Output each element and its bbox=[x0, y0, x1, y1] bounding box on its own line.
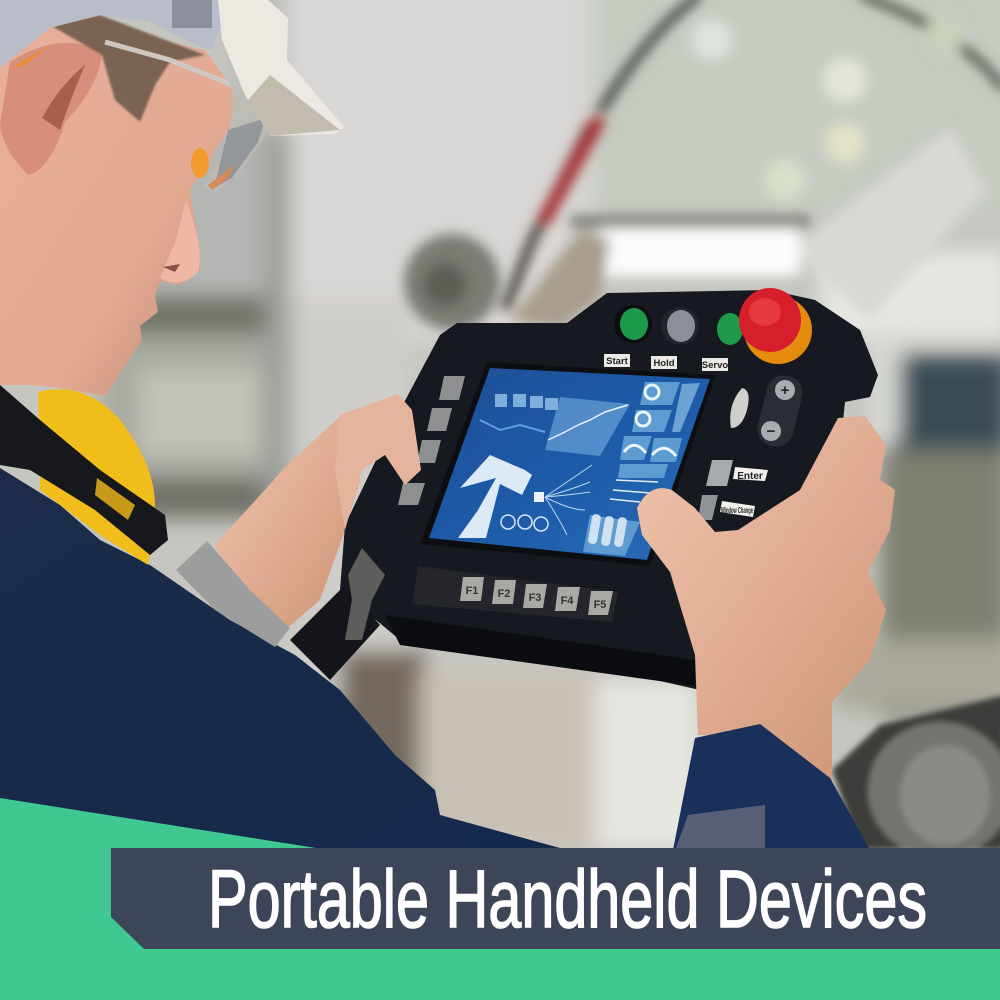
worker jacket bbox=[0, 468, 560, 848]
function keys bbox=[412, 566, 618, 622]
handheld control device bbox=[290, 288, 878, 690]
left side buttons bbox=[398, 376, 465, 505]
safety glasses bbox=[105, 42, 270, 192]
function keys: F4 bbox=[561, 595, 574, 607]
line trace bbox=[480, 420, 545, 432]
jog wheel bbox=[730, 388, 749, 428]
left hand fingers bbox=[335, 394, 421, 530]
sliders panel bbox=[587, 514, 628, 548]
enter and window change keys bbox=[698, 460, 768, 520]
yellow ear defender and headband bbox=[0, 385, 168, 565]
plus minus rocker: + bbox=[781, 382, 790, 399]
function keys: F1 bbox=[466, 585, 478, 597]
green corner shape bbox=[0, 798, 1000, 1000]
emergency stop button bbox=[739, 288, 812, 364]
hair bbox=[50, 15, 205, 122]
ear bbox=[0, 43, 102, 175]
robot arm silhouette bbox=[458, 455, 532, 538]
top buttons bbox=[614, 305, 743, 345]
function keys: F2 bbox=[498, 588, 510, 600]
right hand bbox=[637, 416, 895, 782]
nose bbox=[160, 200, 200, 283]
hard hat bbox=[0, 0, 344, 136]
dashboard tiles bbox=[495, 394, 558, 410]
plus minus rocker: − bbox=[767, 423, 776, 440]
enter and window change keys: Window Change bbox=[721, 506, 753, 515]
keys and lanyard bbox=[345, 548, 385, 640]
labels Start Hold Servo: Start bbox=[606, 356, 629, 367]
connector lines bbox=[534, 492, 544, 502]
function keys: F3 bbox=[529, 592, 541, 604]
right sleeve bbox=[673, 724, 870, 850]
wristwatch bbox=[176, 541, 290, 647]
worker head bbox=[0, 15, 240, 396]
small dials bbox=[501, 515, 548, 531]
labels Start Hold Servo: Hold bbox=[653, 358, 675, 369]
labels Start Hold Servo: Servo bbox=[702, 360, 728, 371]
slider lines bbox=[610, 480, 658, 502]
orange earplug bbox=[191, 148, 209, 178]
bar grid chart bbox=[545, 397, 630, 456]
enter and window change keys: Enter bbox=[737, 471, 763, 482]
labels Start Hold Servo bbox=[604, 354, 728, 371]
left hand back bbox=[215, 412, 360, 630]
gauge circles bbox=[583, 382, 682, 556]
plus minus rocker bbox=[754, 372, 806, 450]
device screen bbox=[420, 362, 716, 566]
function keys: F5 bbox=[594, 599, 606, 611]
